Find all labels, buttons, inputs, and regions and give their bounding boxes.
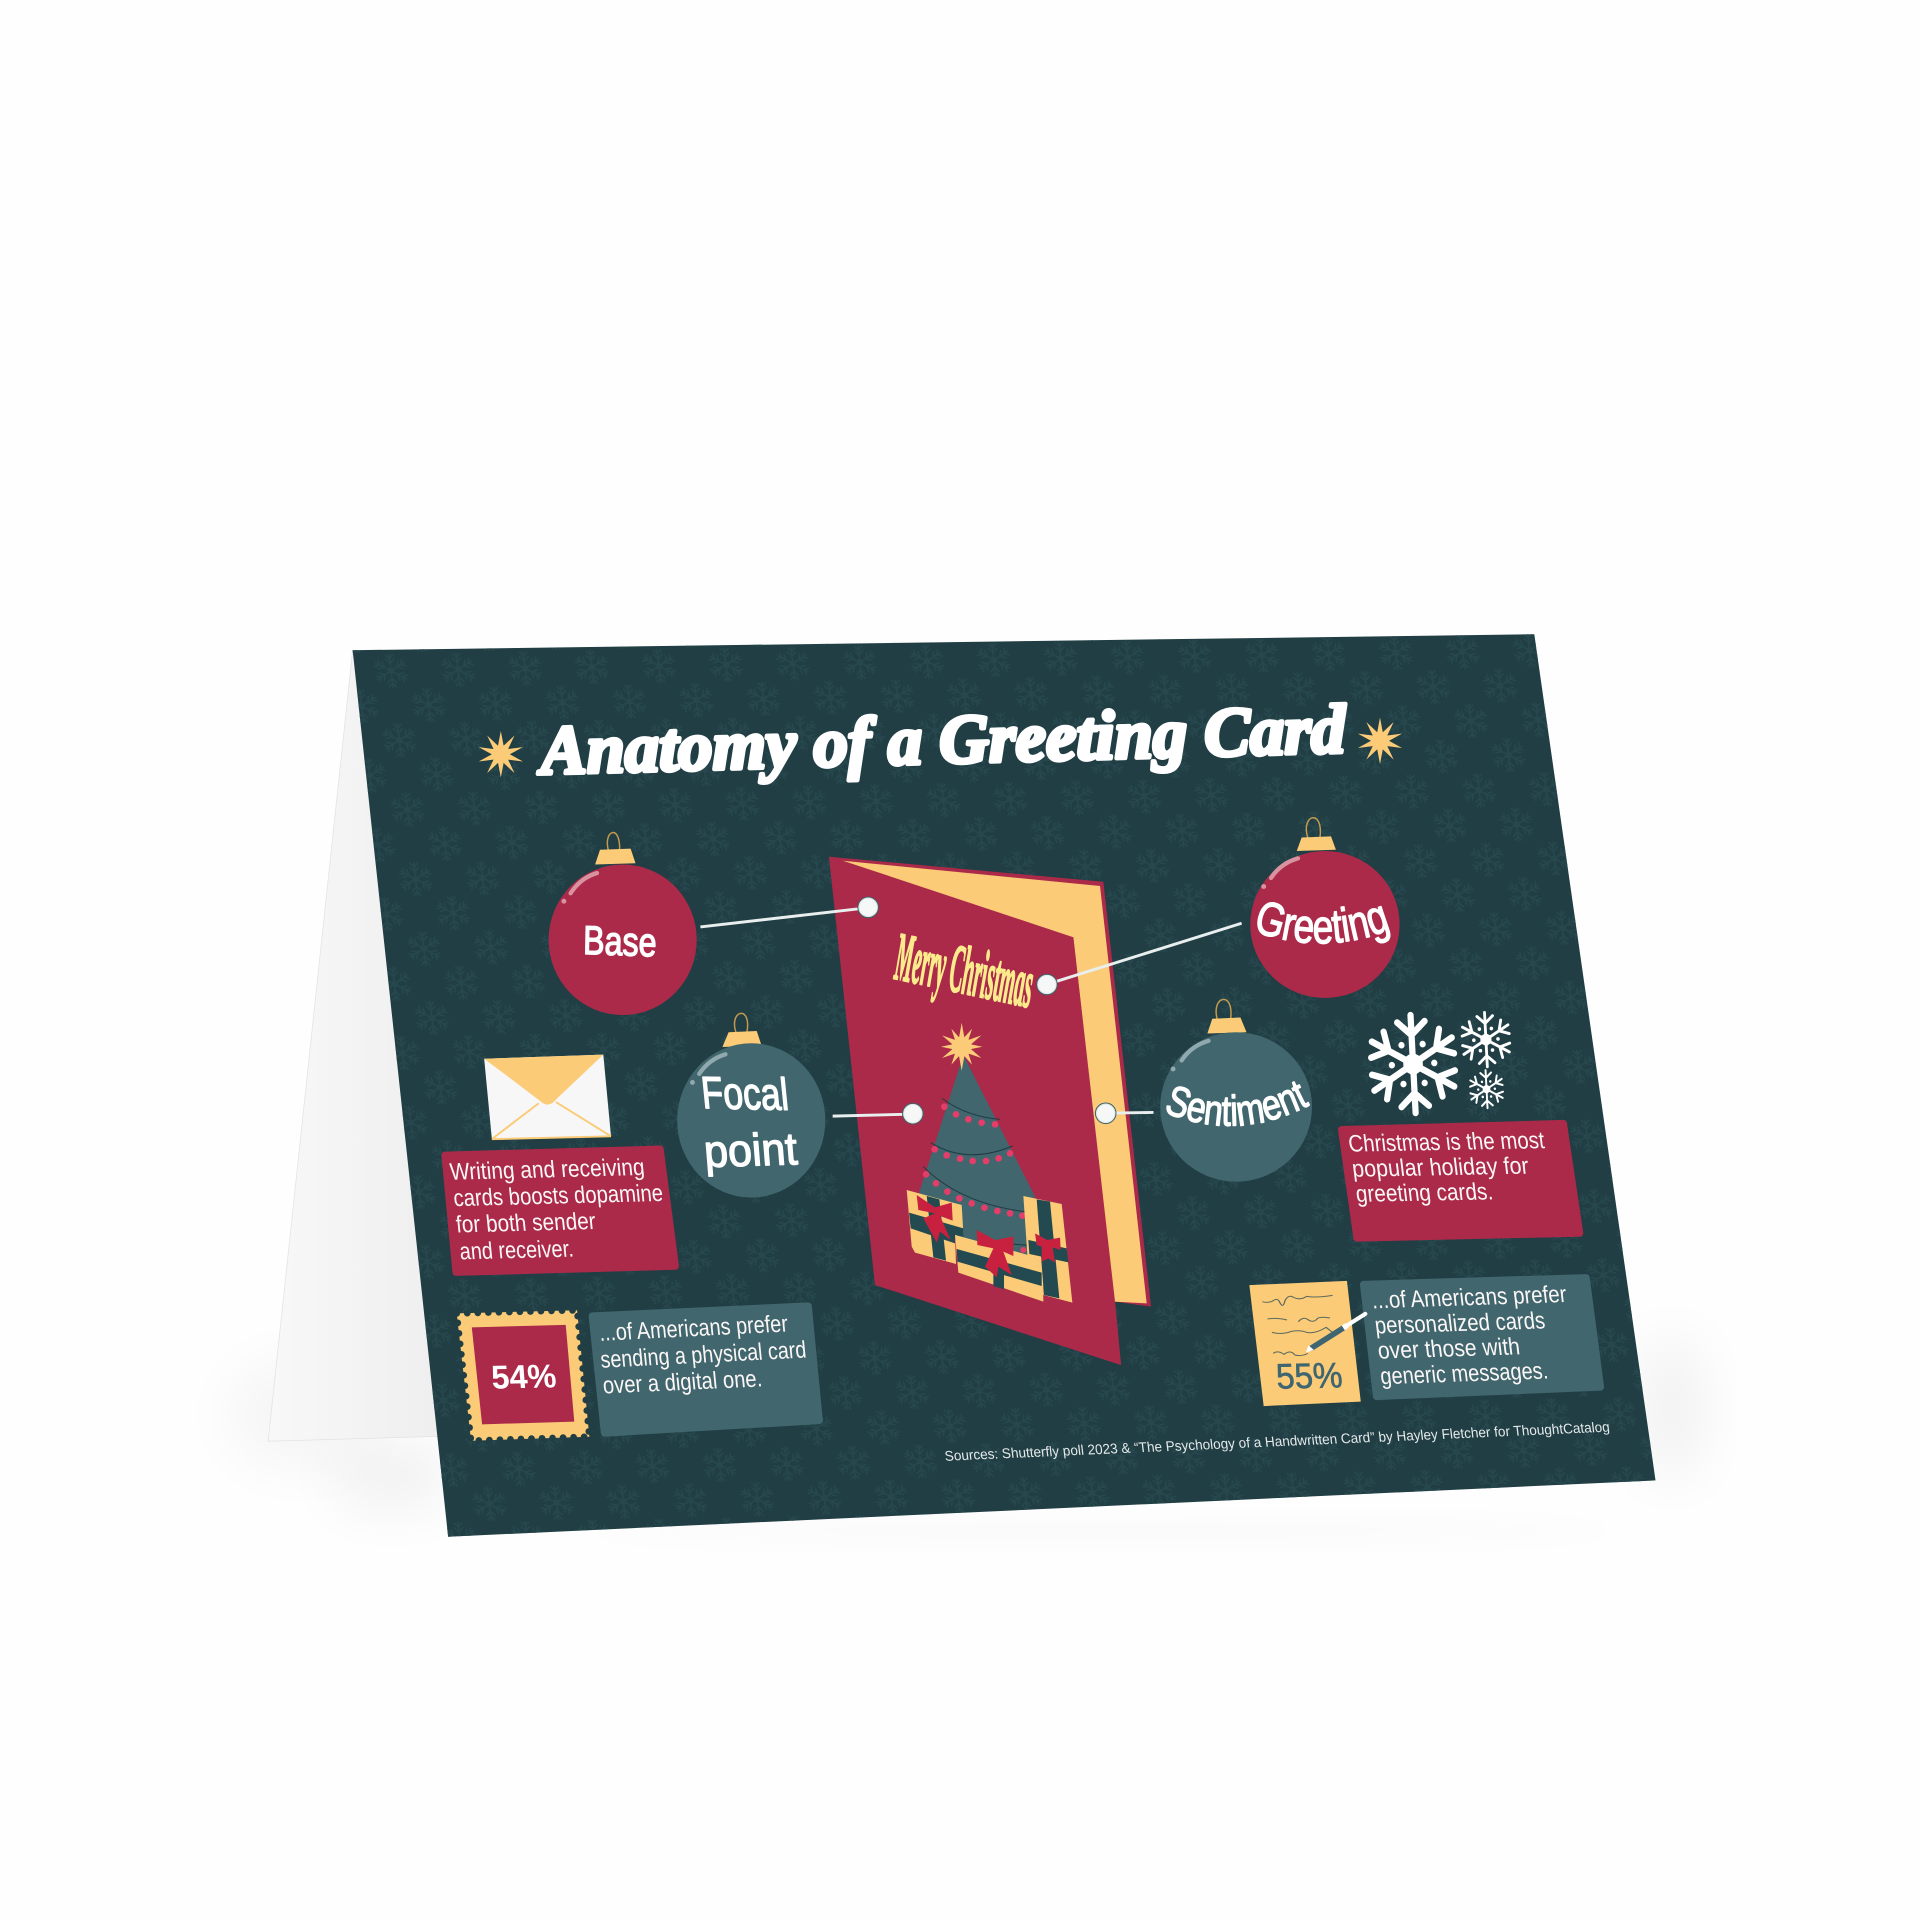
- title text: Anatomy of a Greeting Card: [536, 691, 1347, 790]
- ornament: Base: [549, 833, 697, 1015]
- sources note: Sources: Shutterfly poll 2023 & “The Psychology of a Handwritten Card” by Hayley Fletcher for ThoughtCatalog: [944, 1419, 1611, 1464]
- tree star: [940, 1023, 983, 1071]
- icon: snowflakes: [1364, 1011, 1514, 1115]
- card background: [353, 634, 1656, 1537]
- card front cover: [829, 857, 1121, 1365]
- icon: right star: [1357, 718, 1403, 764]
- panel: dopamine fact: Writing and receiving: [449, 1154, 646, 1186]
- panel: Christmas fact: greeting cards.: [1354, 1178, 1495, 1208]
- panel: Christmas fact: popular holiday for: [1351, 1153, 1530, 1183]
- gift: middle: [955, 1230, 1043, 1302]
- ornament: Base: Base: [583, 917, 657, 965]
- ornament: Sentiment: [1160, 998, 1312, 1182]
- panel: dopamine fact: for both sender: [455, 1208, 597, 1238]
- card back: [829, 857, 1151, 1365]
- gift: right: [1023, 1196, 1072, 1303]
- panel: Christmas fact: Christmas is the most: [1347, 1127, 1546, 1158]
- illustrated card: Merry Christmas: [891, 918, 1037, 1023]
- handwriting lines: [1262, 1295, 1333, 1356]
- snowflake pattern: [353, 634, 1656, 1537]
- note: 55%: [1249, 1281, 1361, 1406]
- icon: pen: [1306, 1314, 1365, 1352]
- icon: left star: [477, 731, 524, 778]
- panel: personalized fact: ...of Americans prefer: [1370, 1281, 1568, 1314]
- christmas tree: [919, 1023, 1035, 1255]
- panel: physical card fact: sending a physical card: [599, 1337, 808, 1374]
- panel: Christmas fact: [1342, 1124, 1580, 1238]
- ornament: Focal point: [677, 1013, 825, 1198]
- panel: physical card fact: [592, 1306, 819, 1433]
- card inside: [843, 861, 1147, 1303]
- callout: Sentiment pointer: [1095, 1103, 1153, 1124]
- title: [477, 691, 1403, 790]
- illustrated card: [829, 857, 1151, 1365]
- panel: dopamine fact: [445, 1149, 675, 1272]
- ornament: Focal point: point: [702, 1123, 800, 1177]
- panel: personalized fact: personalized cards: [1373, 1307, 1547, 1339]
- icon: envelope: [484, 1055, 611, 1139]
- panel: personalized fact: [1364, 1278, 1600, 1396]
- stamp: 54%: [457, 1310, 589, 1441]
- callout: Greeting pointer: [1037, 923, 1242, 995]
- note: 55%: 55%: [1275, 1355, 1344, 1397]
- panel: dopamine fact: and receiver.: [458, 1236, 575, 1265]
- panel: personalized fact: over those with: [1376, 1333, 1522, 1365]
- card back panel: [268, 650, 448, 1537]
- panel: physical card fact: ...of Americans prefer: [598, 1310, 789, 1347]
- small snowflake upper: [1458, 1011, 1514, 1068]
- greeting card front: [352, 634, 1656, 1537]
- ornament: Focal point: Focal: [699, 1067, 791, 1120]
- panel: dopamine fact: cards boosts dopamine: [452, 1180, 664, 1212]
- callout: Focal pointer: [833, 1103, 923, 1124]
- panel: personalized fact: generic messages.: [1379, 1357, 1550, 1390]
- floor shadows: [227, 1335, 1701, 1540]
- ornament: Greeting: Greeting: [1257, 902, 1390, 944]
- small snowflake lower: [1467, 1069, 1506, 1109]
- callout: Base pointer: [700, 897, 878, 927]
- stamp: 54%: 54%: [490, 1358, 558, 1397]
- ornament: Sentiment: Sentiment: [1166, 1081, 1310, 1127]
- ornament: Greeting: [1250, 817, 1400, 998]
- panel: physical card fact: over a digital one.: [602, 1365, 763, 1399]
- large snowflake: [1364, 1013, 1462, 1115]
- gift: left: [907, 1190, 963, 1264]
